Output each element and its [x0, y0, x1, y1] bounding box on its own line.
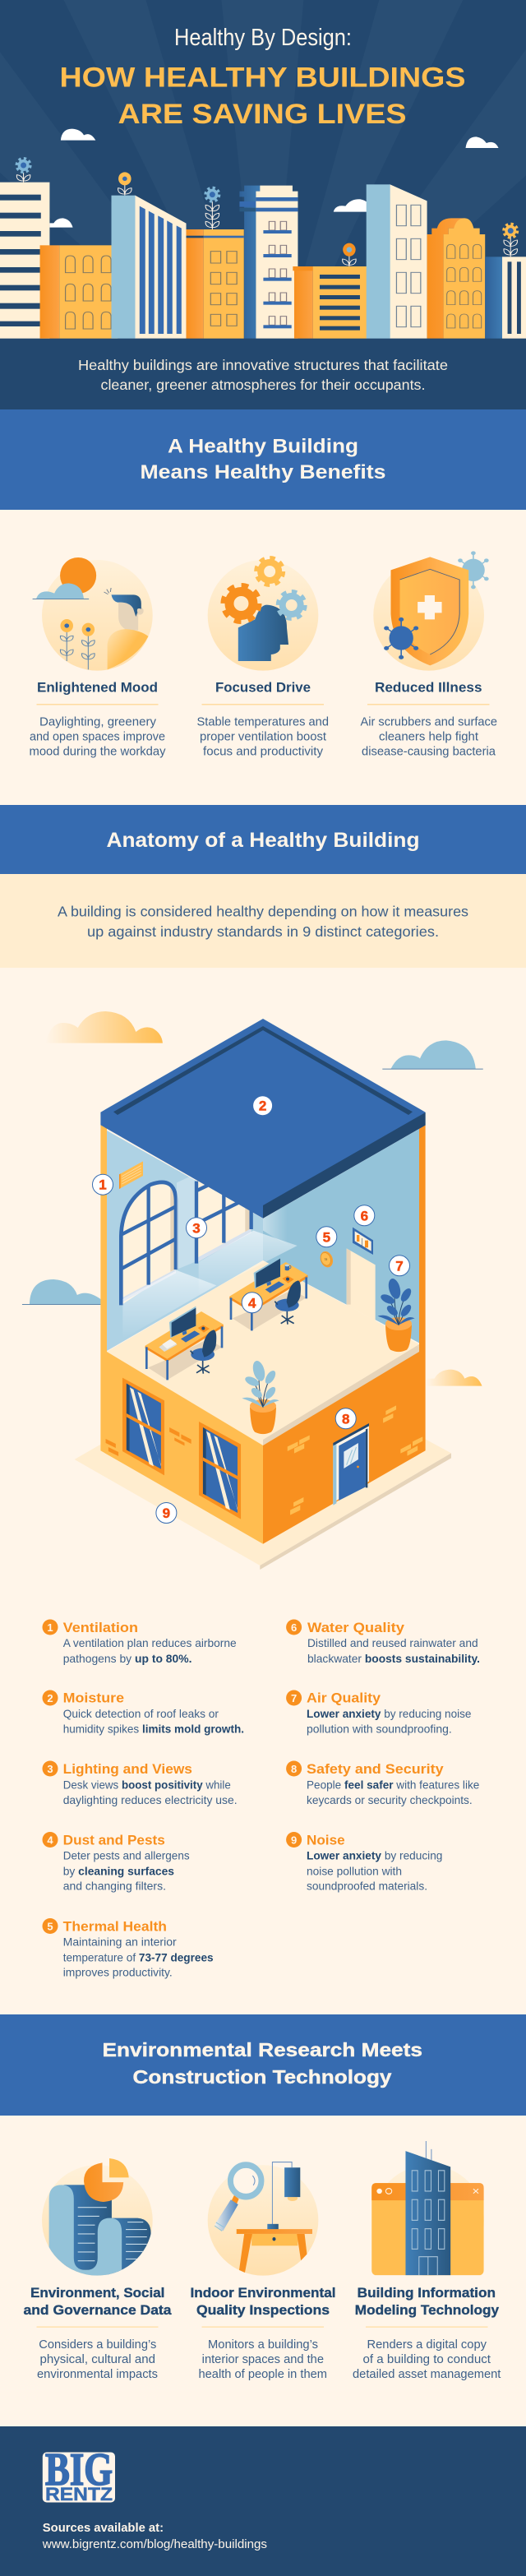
item 5 thermal health: 5	[47, 1921, 53, 1932]
feature: indoor inspections	[191, 2286, 335, 2381]
title: ARE SAVING LIVES	[118, 99, 406, 130]
benefit: enlightened mood: Daylighting, greenery	[39, 715, 156, 728]
glow on walls	[177, 1174, 288, 1270]
icon: focused drive	[208, 557, 318, 671]
logo: BIG	[45, 2444, 113, 2495]
marker 1: 1	[99, 1177, 107, 1193]
sunburst rays	[0, 0, 526, 411]
item 5 thermal health: improves productivity.	[63, 1966, 173, 1979]
panel: benefits header: A Healthy Building	[168, 436, 358, 457]
interior room	[107, 1129, 419, 1445]
item 6 water quality: 6	[291, 1621, 297, 1634]
panel: benefits header: Means Healthy Benefits	[140, 461, 386, 483]
panel: anatomy intro: up against industry standards in 9 distinct categories.	[87, 923, 439, 940]
benefit: enlightened mood: and open spaces improve	[30, 730, 165, 743]
flower 1	[16, 159, 30, 183]
item 6 water quality: Distilled and reused rainwater and	[307, 1636, 478, 1649]
feature: indoor inspections: Indoor Environmental	[191, 2286, 335, 2301]
intro text	[78, 357, 448, 393]
subtitle: Healthy By Design:	[174, 25, 352, 51]
feature: indoor inspections: health of people in them	[199, 2368, 327, 2381]
thermostat	[318, 1250, 335, 1270]
icon: building information modeling	[371, 2141, 484, 2276]
item 4 dust and pests: and changing filters.	[63, 1880, 166, 1893]
item 4 dust and pests: Deter pests and allergens	[63, 1849, 190, 1862]
building 5	[239, 186, 298, 339]
panel: anatomy header: Anatomy of a Healthy Building	[107, 829, 419, 852]
item 7 air quality: Lower anxiety by reducing noise	[307, 1707, 472, 1720]
item 5 thermal health	[43, 1918, 214, 1979]
thermostat: 75	[324, 1258, 327, 1261]
city skyline	[0, 129, 526, 339]
benefit: focused drive	[197, 681, 329, 758]
benefit: focused drive: Stable temperatures and	[197, 715, 329, 728]
panel: footer	[0, 2426, 526, 2576]
item 6 water quality: blackwater boosts sustainability.	[307, 1652, 480, 1665]
item 8 safety and security: People feel safer with features like	[307, 1778, 479, 1791]
item 6 water quality	[286, 1620, 480, 1665]
marker 4	[242, 1293, 262, 1313]
restroom sign	[353, 1228, 373, 1255]
window: second	[196, 1154, 251, 1264]
item 1 ventilation: pathogens by up to 80%.	[63, 1652, 192, 1665]
item 1 ventilation	[43, 1620, 237, 1665]
coffee mug	[285, 1265, 291, 1270]
panel: technology	[23, 2141, 501, 2380]
air vent	[119, 1161, 143, 1189]
item 7 air quality: pollution with soundproofing.	[307, 1722, 452, 1735]
feature: esg data: Considers a building’s	[39, 2338, 156, 2352]
feature: esg data: physical, cultural and	[39, 2353, 155, 2366]
clouds around building	[22, 1011, 483, 1386]
feature: building modeling	[353, 2286, 501, 2381]
feature: esg data: and Governance Data	[23, 2303, 172, 2318]
feature: building modeling: of a building to conduct	[363, 2353, 491, 2366]
item 5 thermal health: Thermal Health	[63, 1918, 167, 1934]
panel: technology header	[0, 2014, 526, 2116]
intro text: cleaner, greener atmospheres for their occupants.	[100, 377, 426, 393]
item 9 noise	[286, 1832, 442, 1893]
feature: building modeling: detailed asset management	[353, 2368, 501, 2381]
window: arched	[121, 1182, 176, 1305]
lower building faces	[100, 1125, 426, 1544]
benefit: focused drive: focus and productivity	[203, 745, 324, 758]
left wall	[107, 1131, 263, 1351]
door	[333, 1423, 369, 1505]
panel: hero	[0, 0, 526, 411]
feature: building modeling: Building Information	[358, 2286, 496, 2301]
plant right	[377, 1277, 415, 1352]
marker 5: 5	[323, 1229, 330, 1245]
flower 2	[118, 172, 132, 196]
windows, bricks and door	[106, 1378, 422, 1519]
panel: technology header: Construction Technology	[133, 2066, 391, 2088]
item 7 air quality: 7	[291, 1692, 297, 1704]
item 7 air quality: Air Quality	[307, 1690, 381, 1706]
item 8 safety and security	[286, 1761, 479, 1806]
item 1 ventilation: Ventilation	[63, 1620, 138, 1635]
marker 6: 6	[361, 1208, 368, 1223]
logo	[43, 2444, 115, 2504]
panel: anatomy intro	[0, 874, 526, 968]
benefit: focused drive: Focused Drive	[215, 681, 311, 696]
building 3	[112, 196, 187, 339]
sources: www.bigrentz.com/blog/healthy-buildings	[42, 2538, 267, 2551]
item 9 noise: Lower anxiety by reducing	[307, 1849, 442, 1862]
building illustration	[75, 1019, 451, 1570]
feature: indoor inspections: interior spaces and the	[202, 2353, 324, 2366]
item 2 moisture: Moisture	[63, 1690, 124, 1706]
item 2 moisture: 2	[47, 1692, 53, 1704]
building 4	[187, 229, 244, 339]
sources: Sources available at:	[43, 2522, 164, 2535]
floor edge	[263, 1344, 419, 1445]
sources	[42, 2522, 267, 2551]
panel: benefits	[0, 510, 526, 805]
number markers	[92, 1096, 409, 1523]
benefit: reduced illness: Reduced Illness	[375, 681, 482, 696]
item 3 lighting and views: daylighting reduces electricity use.	[63, 1793, 238, 1806]
doorway	[347, 1248, 419, 1347]
building 2	[40, 245, 118, 339]
title	[59, 62, 465, 130]
marker 5	[316, 1227, 337, 1247]
item 2 moisture: humidity spikes limits mold growth.	[63, 1722, 244, 1735]
item 1 ventilation: A ventilation plan reduces airborne	[63, 1636, 237, 1649]
marker 7: 7	[395, 1258, 404, 1274]
clouds	[49, 129, 499, 228]
benefit: reduced illness: cleaners help fight	[379, 730, 479, 743]
marker 2: 2	[259, 1098, 266, 1114]
item 2 moisture	[43, 1690, 244, 1735]
marker 2	[253, 1096, 272, 1115]
benefit: enlightened mood: Enlightened Mood	[37, 681, 158, 696]
desk 2	[229, 1257, 307, 1330]
benefit: reduced illness	[360, 681, 497, 758]
item 6 water quality: Water Quality	[307, 1620, 405, 1635]
icon: enlightened mood	[33, 557, 153, 671]
floor	[107, 1260, 419, 1445]
icon: indoor inspection	[208, 2162, 318, 2276]
window left	[122, 1378, 164, 1475]
feature: indoor inspections: Monitors a building’s	[208, 2338, 318, 2352]
feature: indoor inspections: Quality Inspections	[196, 2303, 330, 2318]
item 9 noise: soundproofed materials.	[307, 1880, 427, 1893]
window right	[199, 1422, 241, 1519]
item 4 dust and pests	[43, 1832, 190, 1893]
item 5 thermal health: Maintaining an interior	[63, 1935, 177, 1949]
benefit: enlightened mood: mood during the workday	[30, 745, 166, 758]
flower 5	[504, 224, 517, 257]
benefit: reduced illness: disease-causing bacteria	[362, 745, 496, 758]
marker 1	[92, 1174, 113, 1195]
building 1	[0, 183, 49, 339]
item 8 safety and security: Safety and Security	[307, 1761, 444, 1777]
item 3 lighting and views	[43, 1761, 238, 1806]
marker 9: 9	[163, 1505, 170, 1521]
item 9 noise: 9	[291, 1834, 297, 1847]
item 9 noise: Noise	[307, 1832, 345, 1848]
right wall	[263, 1129, 419, 1343]
item 4 dust and pests: 4	[47, 1834, 53, 1847]
marker 7	[390, 1256, 409, 1276]
roof	[100, 1019, 426, 1219]
marker 3	[186, 1218, 207, 1238]
intro text: Healthy buildings are innovative structures that facilitate	[78, 357, 448, 373]
marker 3: 3	[192, 1220, 201, 1236]
item 3 lighting and views: Desk views boost positivity while	[63, 1778, 231, 1791]
building 9	[485, 257, 526, 339]
marker 8	[335, 1408, 356, 1429]
flower 4	[343, 243, 356, 266]
item 4 dust and pests: Dust and Pests	[63, 1832, 165, 1848]
feature: building modeling: Modeling Technology	[355, 2303, 500, 2318]
panel: anatomy background	[0, 968, 526, 2014]
flower 3	[205, 188, 219, 229]
building 7	[367, 184, 427, 339]
marker 4: 4	[248, 1295, 256, 1311]
item 3 lighting and views: 3	[47, 1763, 53, 1775]
item 8 safety and security: 8	[291, 1763, 297, 1775]
item 5 thermal health: temperature of 73-77 degrees	[63, 1950, 214, 1963]
feature: esg data	[23, 2286, 172, 2381]
marker 9	[156, 1503, 177, 1523]
item 8 safety and security: keycards or security checkpoints.	[307, 1793, 473, 1806]
item 1 ventilation: 1	[47, 1621, 53, 1634]
title: HOW HEALTHY BUILDINGS	[59, 62, 465, 94]
marker 8: 8	[342, 1411, 349, 1427]
feature: esg data: Environment, Social	[30, 2286, 164, 2301]
panel: technology header: Environmental Research Meets	[102, 2039, 422, 2060]
item 2 moisture: Quick detection of roof leaks or	[63, 1707, 219, 1720]
marker 6	[354, 1205, 375, 1226]
icon: esg data	[42, 2158, 153, 2278]
benefit: enlightened mood	[30, 681, 166, 758]
item 9 noise: noise pollution with	[307, 1864, 402, 1877]
legend list	[43, 1620, 480, 1979]
desk 1	[145, 1306, 224, 1380]
panel: anatomy header	[0, 805, 526, 874]
bricks	[106, 1427, 191, 1456]
item 3 lighting and views: Lighting and Views	[63, 1761, 192, 1777]
building 8	[427, 218, 485, 339]
icon: reduced illness	[373, 552, 488, 671]
benefit: reduced illness: Air scrubbers and surface	[360, 715, 497, 728]
building 6	[293, 266, 368, 339]
feature: esg data: environmental impacts	[37, 2368, 158, 2381]
item 7 air quality	[286, 1690, 472, 1735]
plant center	[242, 1359, 279, 1434]
panel: anatomy intro: A building is considered healthy depending on how it measures	[58, 903, 468, 919]
base plate	[75, 1351, 451, 1570]
panel: benefits header	[0, 409, 526, 510]
feature: building modeling: Renders a digital copy	[367, 2338, 487, 2352]
light beams	[122, 1231, 298, 1339]
benefit: focused drive: proper ventilation boost	[200, 730, 327, 743]
item 4 dust and pests: by cleaning surfaces	[63, 1864, 174, 1877]
logo: RENTZ	[45, 2484, 113, 2504]
